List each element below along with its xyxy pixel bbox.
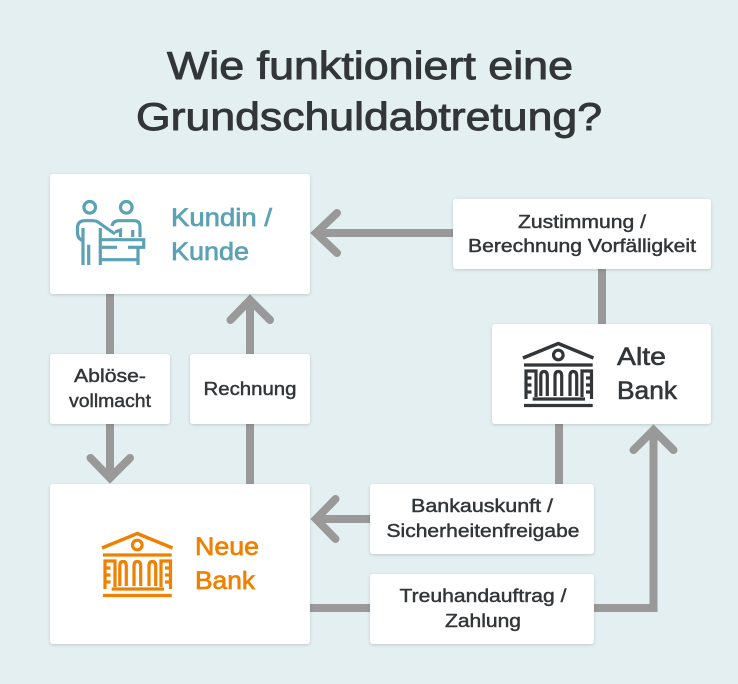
label: Alte Bank: Alte <box>617 343 666 371</box>
arrow: Neue Bank to Kundin via Rechnung <box>230 300 270 484</box>
label: Neue Bank <box>195 533 259 595</box>
icon: bank building <box>523 344 594 406</box>
connector: Alte Bank to Zustimmung <box>598 269 606 324</box>
panel: Ablösevollmacht <box>50 354 170 424</box>
panel: Treuhandauftrag / Zahlung: Zahlung <box>445 611 521 631</box>
panel: Zustimmung / Berechnung Vorfälligkeit: Zustimmung / <box>518 212 646 232</box>
label: Neue Bank: Neue <box>195 533 259 561</box>
label: Kundin / Kunde <box>171 204 272 266</box>
panel: Treuhandauftrag / Zahlung <box>370 574 594 644</box>
panel: Bankauskunft / Sicherheitenfreigabe: Sicherheitenfreigabe <box>386 521 580 541</box>
icon: bank building orange <box>102 534 172 596</box>
panel: Zustimmung / Berechnung Vorfälligkeit <box>453 199 711 269</box>
label: Neue Bank: Bank <box>195 567 256 595</box>
panel: Neue Bank <box>50 484 310 644</box>
panel: Alte Bank <box>492 324 711 424</box>
label: Kundin / Kunde: Kundin / <box>171 204 272 232</box>
panel: Rechnung: Rechnung <box>204 379 296 399</box>
label: Kundin / Kunde: Kunde <box>171 238 249 266</box>
title: Wie funktioniert eine <box>167 45 573 88</box>
panel: Bankauskunft / Sicherheitenfreigabe: Bankauskunft / <box>411 496 553 516</box>
panel: Zustimmung / Berechnung Vorfälligkeit: Berechnung Vorfälligkeit <box>468 236 696 256</box>
icon: two people at a counter <box>78 202 144 265</box>
arrow: Zustimmung to Kundin <box>316 213 453 253</box>
panel: Rechnung <box>190 354 310 424</box>
title: Grundschuldabtretung? <box>136 96 602 139</box>
label: Alte Bank <box>617 343 678 405</box>
panel: Ablösevollmacht: Ablöse- <box>74 366 146 386</box>
panel: Kundin / Kunde <box>50 174 310 294</box>
arrow: Neue Bank to Alte Bank via Treuhandauftrag <box>310 430 674 608</box>
label: Alte Bank: Bank <box>617 377 678 405</box>
panel: Ablösevollmacht: vollmacht <box>69 391 151 411</box>
panel: Treuhandauftrag / Zahlung: Treuhandauftrag / <box>400 586 566 606</box>
arrow: Kundin to Neue Bank via Ablösevollmacht <box>90 294 130 478</box>
panel: Bankauskunft / Sicherheitenfreigabe <box>370 484 594 554</box>
arrow: Alte Bank to Neue Bank via Bankauskunft <box>316 424 559 539</box>
title <box>136 45 602 139</box>
